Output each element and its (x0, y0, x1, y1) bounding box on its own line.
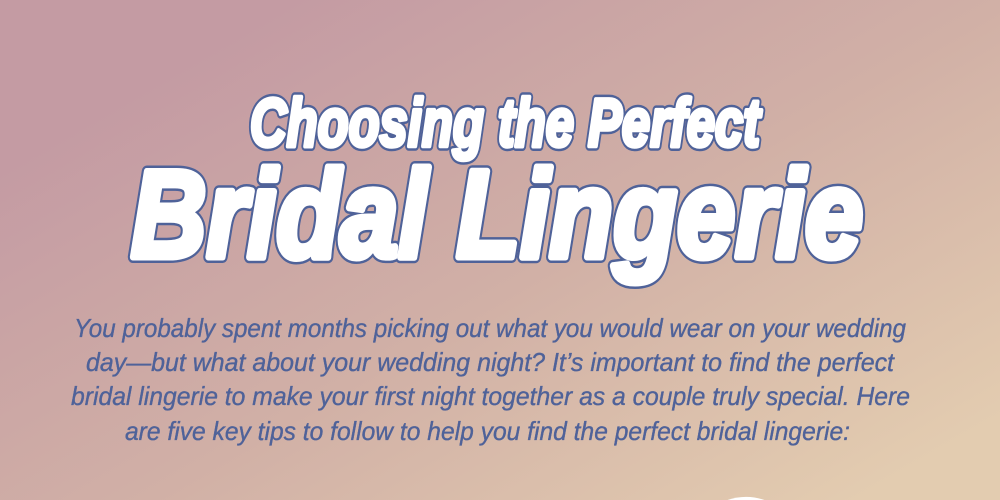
intro paragraph: day—but what about your wedding night? It’s important to find the perfect (86, 347, 896, 377)
title line: Bridal Lingerie: Bridal Lingerie (131, 146, 863, 284)
intro paragraph: bridal lingerie to make your first night together as a couple truly special. Here (71, 381, 910, 411)
title line: Choosing the Perfect: Choosing the Perfect (250, 85, 762, 161)
intro paragraph (71, 313, 910, 446)
title line: Choosing the Perfect: Choosing the Perfect (250, 85, 762, 161)
intro paragraph: You probably spent months picking out what you would wear on your wedding (74, 313, 906, 343)
white circle at bottom edge (728, 497, 764, 500)
title (131, 85, 863, 284)
intro paragraph: are five key tips to follow to help you find the perfect bridal lingerie: (125, 416, 850, 446)
title line: Bridal Lingerie: Bridal Lingerie (131, 146, 863, 284)
